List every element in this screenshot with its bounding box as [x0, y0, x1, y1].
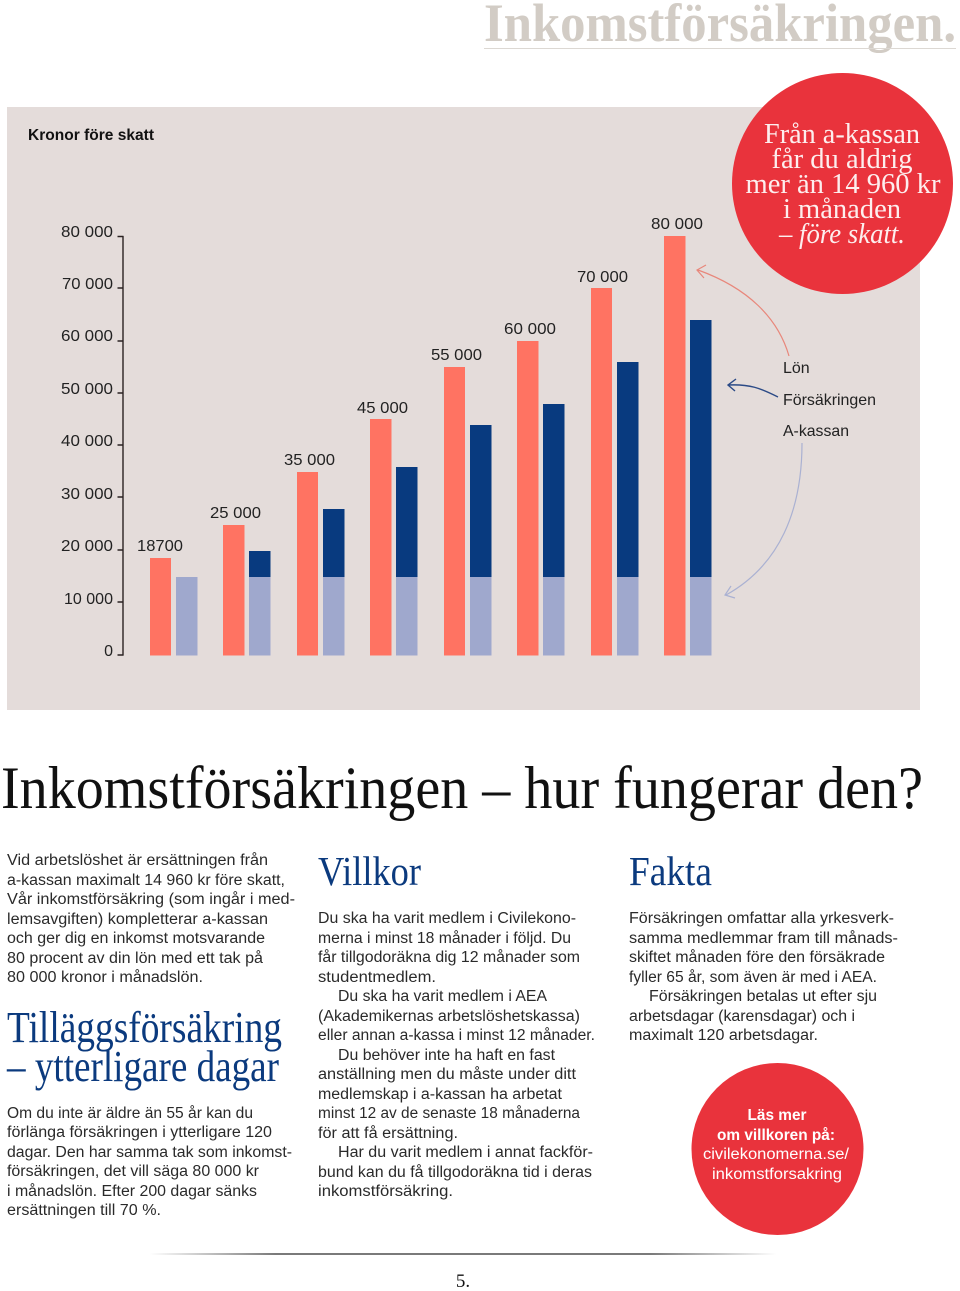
text block: intro: a-kassan maximalt 14 960 kr före skatt, [7, 872, 285, 889]
text block: villkor: minst 12 av de senaste 18 månaderna [318, 1105, 580, 1122]
bar value labels: 35 000 [284, 452, 335, 469]
text block: intro: lemsavgiften) kompletterar a-kassan [7, 911, 268, 928]
text block: intro: 80 000 kronor i månadslön. [7, 969, 203, 986]
text block: villkor [318, 910, 595, 1200]
y axis: 70 000 [62, 276, 113, 293]
text block: tillägg: försäkringen, det vill säga 80 000 kr [7, 1163, 259, 1180]
text block: fakta: Försäkringen omfattar alla yrkesverk- [629, 910, 894, 927]
salary bars [150, 236, 686, 656]
text block: tillägg: i månadslön. Efter 200 dagar sänks [7, 1183, 257, 1200]
a-kassan bars [176, 577, 712, 656]
callout: read more circle: om villkoren på: [717, 1127, 835, 1144]
text block: villkor: (Akademikernas arbetslöshetskassa) [318, 1008, 580, 1025]
bar value labels: 45 000 [357, 400, 408, 417]
text block: fakta [629, 910, 898, 1044]
text block: fakta: samma medlemmar fram till månads- [629, 930, 898, 947]
text block: villkor: inkomstförsäkring. [318, 1183, 453, 1200]
text block: tillägg: dagar. Den har samma tak som inkomst- [7, 1144, 292, 1161]
footer rule [150, 1253, 776, 1255]
bar value labels: 18700 [137, 538, 183, 555]
chart heading: Kronor före skatt [28, 127, 154, 144]
legend [783, 360, 876, 440]
text block: intro [7, 852, 295, 986]
bar value labels [137, 216, 703, 555]
text block: villkor: eller annan a-kassa i minst 12 månader. [318, 1027, 595, 1044]
heading: Tilläggsförsäkring: – ytterligare dagar [6, 1042, 279, 1091]
callout: red circle: mer än 14 960 kr [746, 168, 941, 200]
text block: tillägg: ersättningen till 70 %. [7, 1202, 161, 1219]
text block: villkor: studentmedlem. [318, 969, 436, 986]
heading: Tilläggsförsäkring [6, 1003, 282, 1091]
callout: red circle: får du aldrig [772, 143, 912, 175]
text block: villkor: för att få ersättning. [318, 1125, 458, 1142]
text block: villkor: får tillgodoräkna dig 12 månader som [318, 949, 580, 966]
callout: red circle: i månaden [783, 193, 901, 225]
y axis: 60 000 [61, 328, 113, 345]
y axis: 80 000 [61, 224, 113, 241]
text block: villkor: Du ska ha varit medlem i Civilekono- [318, 910, 576, 927]
legend: Försäkringen [783, 392, 876, 409]
callout: read more circle: inkomstforsakring [712, 1166, 842, 1183]
arrow: a-kassan [725, 443, 802, 598]
callout: read more circle [692, 1063, 864, 1235]
heading: Fakta: Fakta [629, 848, 712, 894]
text block: tillägg: Om du inte är äldre än 55 år kan du [7, 1105, 253, 1122]
heading: Villkor: Villkor [318, 848, 421, 894]
y axis: 20 000 [61, 538, 113, 555]
text block: tillägg: förlänga försäkringen i ytterligare 120 [7, 1124, 272, 1141]
y axis [61, 224, 124, 660]
text block: fakta: Försäkringen betalas ut efter sju [649, 988, 877, 1005]
text block: fakta: fyller 65 år, som även är med i AEA. [629, 969, 877, 986]
text block: intro: och ger dig en inkomst motsvarande [7, 930, 265, 947]
callout: red circle: – före skatt. [778, 218, 905, 250]
bar value labels: 55 000 [431, 347, 482, 364]
text block: villkor: Du ska ha varit medlem i AEA [338, 988, 548, 1005]
arrow: insurance [728, 379, 778, 397]
text block: villkor: merna i minst 18 månader i följd. Du [318, 930, 571, 947]
text block: villkor: bund kan du få tillgodoräkna tid i deras [318, 1164, 592, 1181]
y axis: 50 000 [61, 381, 113, 398]
main heading: Inkomstförsäkringen – hur fungerar den? [1, 755, 923, 821]
y axis: 10 000 [64, 591, 113, 608]
text block: villkor: Har du varit medlem i annat fackför- [338, 1144, 593, 1161]
panel: chart background [7, 107, 920, 710]
y axis: 40 000 [61, 433, 113, 450]
bar value labels: 70 000 [577, 269, 628, 286]
y axis: 30 000 [61, 486, 113, 503]
legend: Lön [783, 360, 810, 377]
bar value labels: 60 000 [504, 321, 556, 338]
heading: Tilläggsförsäkring: Tilläggsförsäkring [7, 1003, 282, 1052]
callout: red circle [732, 73, 953, 294]
text block: villkor: Du behöver inte ha haft en fast [338, 1047, 556, 1064]
text block: fakta: skiftet månaden före den försäkrade [629, 949, 885, 966]
y axis: 0 [104, 643, 113, 660]
bar value labels: 80 000 [651, 216, 703, 233]
callout: read more circle: Läs mer [748, 1107, 806, 1124]
text block: villkor: anställning men du måste under ditt [318, 1066, 577, 1083]
text block: intro: Vid arbetslöshet är ersättningen från [7, 852, 268, 869]
callout: read more circle: civilekonomerna.se/ [703, 1146, 850, 1163]
bar value labels: 25 000 [210, 505, 261, 522]
callout: red circle: Från a-kassan [764, 118, 920, 150]
text block: intro: 80 procent av din lön med ett tak på [7, 950, 263, 967]
text block: tillägg [7, 1105, 292, 1219]
insurance bars [249, 320, 712, 577]
arrow: salary [697, 265, 789, 356]
text block: fakta: arbetsdagar (karensdagar) och i [629, 1008, 855, 1025]
legend: A-kassan [783, 423, 849, 440]
text block: fakta: maximalt 120 arbetsdagar. [629, 1027, 818, 1044]
text block: intro: Vår inkomstförsäkring (som ingår i med- [7, 891, 295, 908]
bar chart [137, 216, 712, 656]
text block: villkor: medlemskap i a-kassan ha arbetat [318, 1086, 563, 1103]
